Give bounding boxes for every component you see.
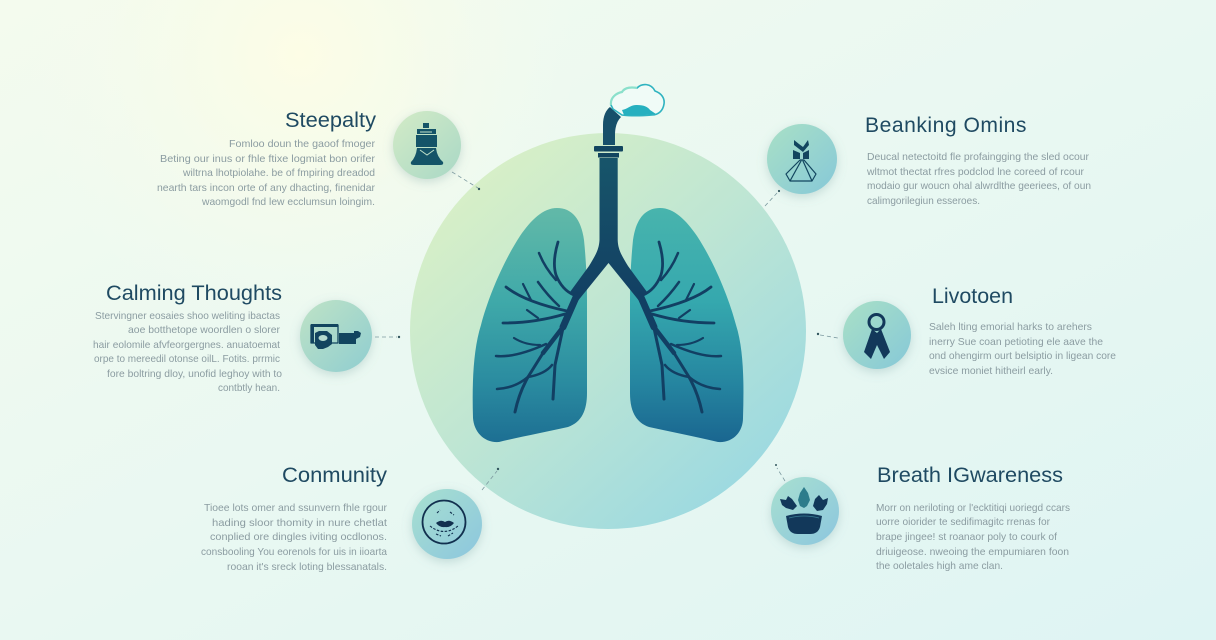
icon: camera and truck — [300, 300, 372, 372]
body text: orpe to mereedil otonse oilL. Fotits. prrmic — [94, 353, 280, 365]
trachea collar — [594, 146, 623, 158]
body text: Beting our inus or fhle ftixe logmiat bon orifer — [160, 153, 376, 165]
body text: modaio gur woucn ohal alwrdlthe geeriees, of oun — [867, 180, 1091, 192]
icon: hourglass tent — [767, 124, 837, 194]
connector — [775, 464, 785, 481]
icon: awareness ribbon — [843, 301, 911, 369]
heading: Beanking Omins — [865, 114, 1027, 137]
body text: wltmot thectat rfres podclod lne coreed of rcour — [866, 166, 1084, 178]
connector — [817, 333, 838, 338]
body text: driuigeose. nweoing the empumiaren foon — [876, 546, 1069, 558]
panel: Livotoen — [817, 285, 1116, 377]
heading: Conmunity — [282, 464, 388, 487]
panel: Community — [201, 464, 499, 573]
left bronchi — [496, 242, 577, 412]
body text: Saleh lting emorial harks to arehers — [929, 321, 1092, 333]
connector — [765, 190, 780, 206]
body text: consbooling You eorenols for uis in iioarta — [201, 546, 387, 558]
body text — [93, 310, 282, 394]
heading: Calming Thoughts — [106, 282, 282, 305]
body text — [157, 138, 376, 208]
body text: conplied ore dingles iviting ocdlonos. — [210, 531, 387, 543]
heading: Breath IGwareness — [877, 464, 1063, 487]
heading: Livotoen — [932, 285, 1013, 308]
connector — [375, 336, 400, 338]
curved pipe — [603, 107, 621, 145]
panel: Breath Awareness — [771, 464, 1070, 572]
body text — [929, 321, 1116, 377]
body text: Tioee lots omer and ssunvern fhle rgour — [204, 502, 387, 514]
body text: contbtly hean. — [218, 382, 280, 394]
heading: Steepalty — [285, 109, 377, 132]
central circle — [410, 133, 806, 529]
connector — [452, 172, 480, 190]
body text: waomgodl fnd lew ecclumsun loingim. — [201, 196, 375, 208]
body text — [201, 502, 387, 573]
left lung — [473, 208, 587, 442]
body text: evsice moniet hitheirl early. — [929, 365, 1053, 377]
panel: Steepalty — [157, 109, 480, 208]
panel: Beanking Omins — [765, 114, 1091, 207]
icon: smiling face — [412, 489, 482, 559]
body text: the ooletales high ame clan. — [876, 560, 1003, 572]
right bronchi — [640, 242, 721, 412]
right lung — [630, 208, 743, 442]
body text: fore boltring dloy, unofid leghoy with to — [107, 368, 282, 380]
body text: calimgorilegiun esseroes. — [867, 195, 980, 207]
body text: hading sloor thomity in nure chetlat — [212, 517, 387, 529]
icon: bell buoy — [393, 111, 461, 179]
body text: ond ohengirm ourt belsiptio in ligean core — [929, 350, 1116, 362]
trachea — [570, 158, 647, 302]
body text: wiltrna lhotpiolahe. be of fmpiring dreadod — [182, 167, 375, 179]
body text: rooan it's sreck loting blessanatals. — [227, 561, 387, 573]
body text: inerry Sue coan petioting ele aave the — [929, 336, 1103, 348]
body text: brape jingee! st roanaor poly to courk of — [876, 531, 1057, 543]
body text: aoe botthetope woordlen o slorer — [128, 324, 280, 336]
body text: hair eolomile afvfeorgergnes. anuatoemat — [93, 339, 280, 351]
body text: nearth tars incon orte of any dhacting, finenidar — [157, 182, 375, 194]
body text: Fomloo doun the gaoof fmoger — [229, 138, 376, 150]
body text: Stervingner eosaies shoo weliting ibactas — [95, 310, 280, 322]
body text: Deucal netectoitd fle profaingging the sled ocour — [867, 151, 1089, 163]
icon: plant bowl — [771, 477, 839, 545]
connector — [482, 468, 499, 490]
body text: Morr on neriloting or l'ecktitiqi uoriegd ccars — [876, 502, 1070, 514]
body text — [866, 151, 1091, 207]
panel: Calming Thoughts — [93, 282, 400, 394]
body text: uorre oiorider te sedifimagitc rrenas for — [876, 516, 1050, 528]
smoke cloud — [611, 85, 664, 116]
lungs illustration — [473, 85, 743, 442]
body text — [876, 502, 1070, 572]
